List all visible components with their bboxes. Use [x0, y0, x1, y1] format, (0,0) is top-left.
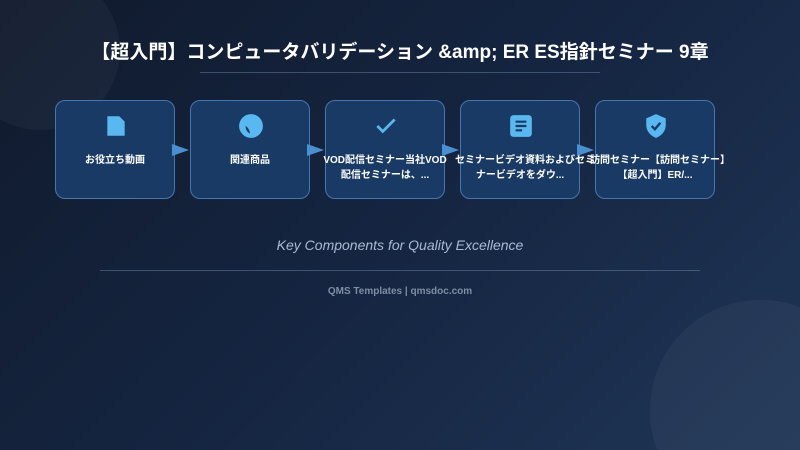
arrow 1	[172, 144, 189, 156]
box 4: ナービデオをダウ...	[476, 170, 564, 181]
box 4	[460, 100, 580, 199]
icon: shield	[646, 114, 666, 138]
box 3: 配信セミナーは、...	[341, 170, 429, 181]
arrow 3	[442, 144, 459, 156]
box 2: 関連商品	[230, 155, 270, 166]
box 1	[55, 100, 175, 199]
box 5	[595, 100, 715, 199]
box 3	[325, 100, 445, 199]
subtitle: Key Components for Quality Excellence	[277, 237, 523, 253]
box 3: VOD配信セミナー当社VOD	[323, 155, 447, 166]
arrow 2	[307, 144, 324, 156]
icon: file	[107, 116, 125, 136]
arrow 4	[577, 144, 594, 156]
icon: check	[376, 118, 396, 134]
box 5: 訪問セミナー【訪問セミナー】	[590, 155, 730, 166]
box 1: お役立ち動画	[85, 155, 145, 166]
footer: QMS Templates | qmsdoc.com	[328, 286, 472, 297]
box 4: セミナービデオ資料およびセミ	[455, 155, 595, 166]
icon: globe	[239, 114, 263, 138]
box 5: 【超入門】ER/...	[617, 170, 692, 181]
icon: document	[510, 115, 532, 137]
box 2	[190, 100, 310, 199]
title: 【超入門】コンピュータバリデーション &amp; ER ES指針セミナー 9章	[91, 42, 709, 63]
